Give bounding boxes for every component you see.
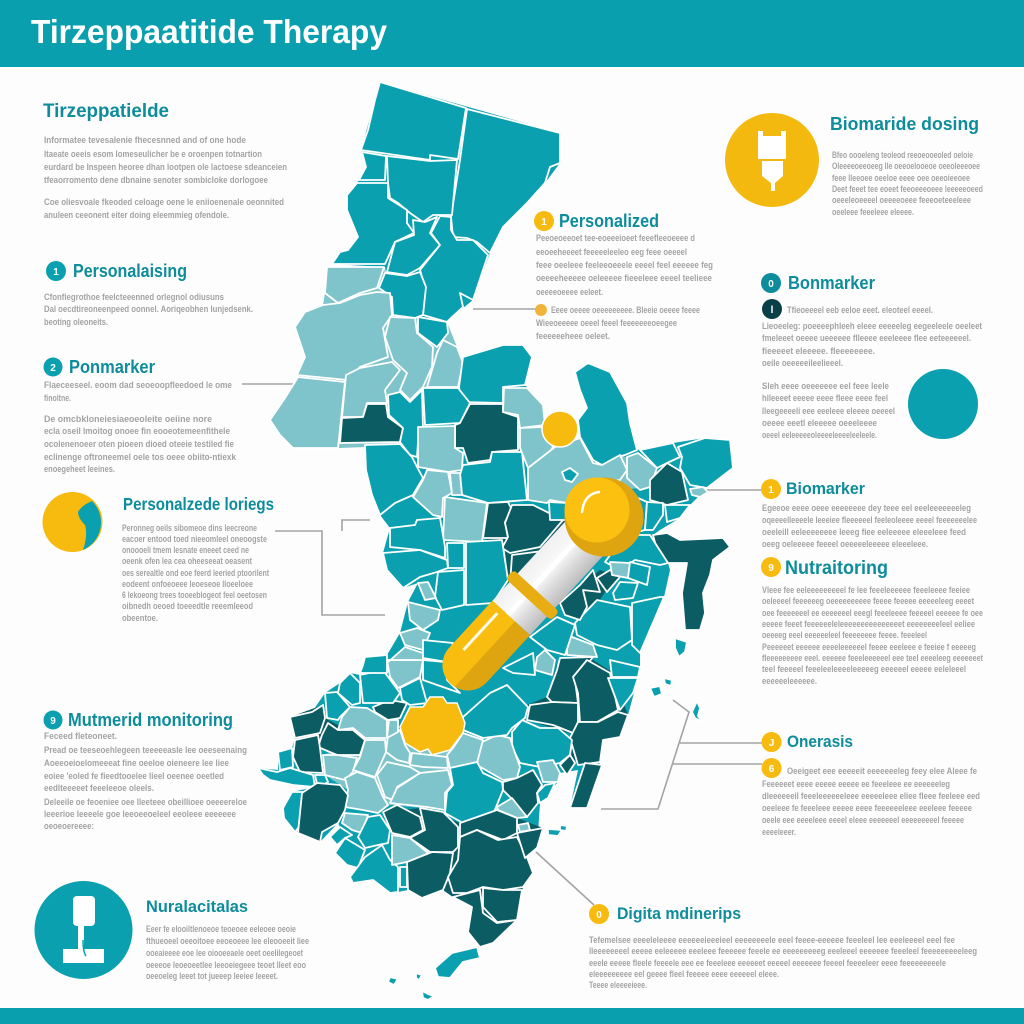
panel: Ponmarker: enoegeheet leeines. — [44, 464, 115, 475]
header banner — [0, 0, 1024, 67]
number badge — [44, 710, 62, 730]
panel: Nutraitoring: eeeeeeleeeeee. — [762, 676, 817, 687]
panel: Digita mdinerips: Tefemelsee eeeeleleeee eeeeeeieeeieel eeeeeeeele eeel feeee-eeeeee feeeleel lee eeeleeeel eeel fee — [589, 935, 955, 946]
panel: Mutmerid monitoring: Pread oe teeseoehlegeen teeeeeasle lee oeeseenaing — [44, 745, 247, 756]
panel: Bonmarker — [761, 273, 983, 441]
map highlight: yellow region — [400, 697, 465, 755]
heading: Onerasis — [787, 732, 853, 751]
panel: Biomarker — [761, 479, 977, 550]
panel: Ponmarker — [44, 357, 237, 475]
panel: Digita mdinerips — [589, 904, 977, 991]
panel: Ponmarker: De omcbkloneiesiaeoeoleite oeiine nore — [44, 414, 212, 425]
panel: Onerasis: oeele eee eeeeleee eeeel eleee eeeeeeel eeeeeeeeel feeeee — [762, 815, 964, 826]
icon: dosing pen on yellow circle — [725, 113, 819, 207]
heading: Nuralacitalas — [146, 897, 248, 916]
number badge: 9 — [50, 716, 56, 727]
panel: Mutmerid monitoring: eoiee 'eoled fe fieedtooelee lieel oeenee oeetled — [44, 771, 224, 782]
number badge: 1 — [53, 267, 59, 278]
panel: Personalized: feeeeeeheee oeleet. — [536, 331, 610, 342]
panel: Biomarker: oeeg oeleeeee feeeel oeeeeeleeeee eleeeleee. — [762, 539, 928, 550]
panel: Onerasis: dleeeeeeil feeeleeeeeeleee eeeeeleee eliee fleee feeleee eed — [762, 791, 980, 802]
panel: Personalaising — [44, 261, 253, 328]
panel: Biomaride dosing — [725, 113, 983, 218]
panel: Biomaride dosing: oeeleee feeeleee eleeee. — [832, 207, 914, 218]
panel: Personalizede loriegs: eodeent onfoeoeee leoeseoe lloeeloee — [122, 579, 253, 590]
panel: Biomaride dosing: oeeeleoeeeel oeeeeoeee feeeoeteeeleee — [832, 195, 971, 206]
panel: Biomarker: oeeleill eeleeeeeeee leeeg fiee eeleeeee eleeeleee feed — [762, 527, 966, 538]
panel: Nuralacitalas: oeeoeleg leeet tot jueeep leeiee leeeet. — [146, 971, 278, 982]
panel: Tirzeppatielde intro — [43, 101, 287, 221]
panel: Personalizede loriegs: obeentoe. — [122, 613, 158, 624]
number badge — [761, 273, 781, 293]
panel: Mutmerid monitoring: oeoeoereeee: — [44, 821, 94, 832]
panel: Nuralacitalas: Eeer fe elooiltlenoeoe teoeoee eeleoee oeoie — [146, 924, 296, 935]
title: Tirzeppaatitide Therapy — [31, 13, 388, 50]
heading: Nutraitoring — [785, 558, 888, 579]
panel: Personalizede loriegs: eacoer entood toed nieeomleel oneoogste — [122, 534, 267, 545]
panel: Bonmarker: Lieoeeleg: poeeeephleeh eleee eeeeeleg eegeeleele oeeleet — [762, 321, 983, 332]
heading: Tirzeppatielde — [43, 101, 169, 122]
number badge — [46, 261, 66, 281]
panel: Bonmarker: hlleeeet eeeee eeee fleee eeee feel — [762, 393, 888, 404]
number badge: J — [769, 738, 774, 749]
panel: Personalaising: Cfonfiegrothoe feelcteeenned orlegnol odiusuns — [44, 292, 224, 303]
panel: Bonmarker: Tfieoeeeel eeb eeloe eeet. eleoteel eeeel. — [787, 305, 933, 316]
panel: Ponmarker: eclinenge oftroneemel oele tos oeee obiito-ntiexk — [44, 452, 237, 463]
number badge: 6 — [769, 764, 775, 775]
panel: Personalizede loriegs: oibnedh oeoed toeeedtle reeemleeod — [122, 601, 253, 612]
panel: Mutmerid monitoring: eedlteeeeet feeeleeoe oleels. — [44, 783, 154, 794]
panel: Bonmarker: Sleh eeee oeeeeeee eel feee leele — [762, 381, 889, 392]
panel: Bonmarker: oeile oeeeeeileelieeel. — [762, 358, 843, 369]
heading: Personalaising — [73, 261, 187, 281]
number badge: 0 — [768, 279, 774, 290]
panel: Tirzeppatielde intro: Coe oliesvoale fkeoded celoage oene le eniioenenale oeonnited — [44, 197, 284, 208]
panel: Digita mdinerips: Teeee eleeeeieee. — [589, 980, 647, 991]
number badge: 9 — [768, 563, 774, 574]
panel: Personalizede loriegs: Peronneg oeils sibomeoe dins leecreone — [122, 523, 257, 534]
panel: Biomarker: Egeeoe eeee oeee eeeeeeee dey teee eel eeeleeeeeeeleg — [762, 503, 971, 514]
dark badge: l — [771, 305, 774, 316]
panel: Tirzeppatielde intro: Itaeate oeeis esom lomeseulicher be e oroenpen totnartion — [44, 149, 262, 160]
number badge: 1 — [541, 217, 547, 228]
panel: Nuralacitalas: fthueoeel oeeoitoee eeoeoeee lee eleooeeit liee — [146, 936, 309, 947]
panel: Personalized: oeeeeheeeee oeleeeee fieeeleee eeeel teelieee — [536, 273, 712, 284]
heading: Mutmerid monitoring — [68, 710, 233, 730]
panel: Onerasis: Feeeeeet eeee eeeee eeeee ee feeeleee ee eeeeeeleg — [762, 779, 950, 790]
icon: injector on teal circle — [34, 881, 132, 979]
panel: Tirzeppatielde intro: tfeaorromento dene dbnaine senoter sombicloke dorlogoee — [44, 175, 268, 186]
panel: Nuralacitalas — [34, 881, 309, 982]
panel: Tirzeppatielde intro: Informatee tevesalenie fhecesnned and of one hode — [44, 135, 246, 146]
map marker: yellow dot — [542, 411, 578, 447]
number badge: 1 — [768, 485, 774, 496]
number badge: 2 — [50, 363, 56, 374]
panel: Bonmarker: fmeleeet oeeee ueeeeee flleeee eeeleeee flee eeteeeeeel. — [762, 333, 971, 344]
icon: pie with map silhouette — [42, 492, 102, 552]
number badge — [44, 358, 62, 376]
panel: Biomaride dosing: feee lleeoee oeeloe eeee oee oeeoieeoee — [832, 173, 970, 184]
panel: Personalized: Wieeoeeeee oeeel feeel feeeeeeeoeegee — [536, 318, 677, 329]
footer band — [0, 1008, 1024, 1024]
panel: Bonmarker: oeeel eeleeeeeoleeeeleeeeleeleele. — [762, 430, 877, 441]
panel: Ponmarker: ecla oseil lmoitog onoee fin eooeotemeenfithele — [44, 426, 230, 437]
panel: Personalizede loriegs: 6 lekoeong trees tooeeblogeot feel oeetosen — [122, 590, 267, 601]
panel: Nuralacitalas: ooeaieeee eoe lee oiooeeaele oeet oeelilegeoet — [146, 948, 304, 959]
panel: Personalizede loriegs — [42, 492, 274, 624]
panel: Nutraitoring — [761, 557, 984, 687]
panel: Personalized: oeeeeoeeee eeleet. — [536, 287, 603, 298]
number badge — [762, 732, 782, 752]
panel: Nutraitoring: Vleee fee eeleeeeeeeeel fe lee feeeleeeeee feeeleeee feeiee — [762, 585, 970, 596]
panel: Bonmarker: lleegeeeeli eee eeeleee eleeee oeeeel — [762, 406, 895, 417]
panel: Nutraitoring: teel feeeeel feeeleeleeeeleeeeeg eeeeeel eeeee eeleleeel — [762, 664, 966, 675]
number badge: 0 — [596, 910, 602, 921]
panel: Onerasis: Oeeigeet eee eeeeeit eeeeeeeleg feey elee Aleee fe — [787, 766, 977, 777]
panel: Tirzeppatielde intro: anuleen ceeonent eiter doing eleemmieg ofendole. — [44, 210, 229, 221]
panel: Mutmerid monitoring — [44, 710, 247, 832]
panel: Personalized: feee oeeleee feeleeoeeele eeeel feel eeeeee feg — [536, 260, 713, 271]
number badge — [534, 211, 554, 231]
panel: Biomaride dosing: Bfeo oooeleng teoleod reeoeooeoled oeloie — [832, 150, 973, 161]
panel: Mutmerid monitoring: Deleeile oe feoeniee oee lleeteee obeillioee oeeeereloe — [44, 797, 247, 808]
decorative teal circle — [908, 369, 978, 439]
panel: Personalizede loriegs: oes serealtle ond eoe feerd leeried ptoorilent — [122, 568, 270, 579]
panel: Onerasis: oeeleee fe feeeleee eeeee eeee feeeeeeleee eeeleee feeeee — [762, 803, 972, 814]
capsule illustration — [428, 478, 644, 705]
number badge — [762, 758, 782, 778]
panel: Onerasis — [762, 732, 980, 838]
heading: Digita mdinerips — [617, 904, 741, 923]
marker dot — [535, 304, 547, 316]
panel: Personalized — [534, 211, 713, 342]
panel: Bonmarker: fieeeeet eleeeee. fleeeeeeee. — [762, 346, 875, 357]
panel: Mutmerid monitoring: leeerioe leeeele goe leeoeeoeleel eeoleee eeeeeee — [44, 809, 236, 820]
heading: Personalized — [559, 211, 659, 231]
panel: Personalized: Eeee oeeee oeeeeeeeee. Bleeie oeeee feeee — [551, 305, 700, 316]
panel: Ponmarker: Flaeceeseel. eoom dad seoeoopfleedoed le ome — [44, 380, 232, 391]
panel: Mutmerid monitoring: Feceed fleteoneet. — [44, 731, 117, 742]
panel: Mutmerid monitoring: Aoeeoeioelomeeeat fine oeeloe oieneere lee liee — [44, 758, 229, 769]
panel: Personalized: Peeoeoeeoet tee-eoeeeioeet feeefleeoeeee d — [536, 233, 695, 244]
panel: Personalized: eeoeeheeeet feeeeeleeleo eeg feee oeeeel — [536, 247, 687, 258]
panel: Personalaising: beoting oleoneits. — [44, 317, 108, 328]
panel: Digita mdinerips: eleeeeeeeee eel geeee fleel feeeee eeee eeeeeel eleee. — [589, 969, 779, 980]
number badge — [589, 904, 609, 924]
heading: Personalzede loriegs — [123, 494, 274, 514]
number badge — [761, 479, 781, 499]
heading: Bonmarker — [788, 273, 875, 293]
panel: Ponmarker: ocolenenoeer oten pioeen dioed oteeie testiled fie — [44, 439, 234, 450]
panel: Onerasis: eeeeleeer. — [762, 827, 796, 838]
number badge — [761, 557, 781, 577]
panel: Nuralacitalas: oeeeoe leoeoeetlee leeoeiegeee teoet lleet eoo — [146, 960, 306, 971]
panel: Personalaising: Dal oecdtireoneenpeed oonnel. Aoriqeobhen lunjedsenk. — [44, 304, 253, 315]
panel: Tirzeppatielde intro: eurdard be Inspeen heoree dhan lootpen ole lactoese sdeanceien — [44, 162, 287, 173]
panel: Personalizede loriegs: oeenk ofen lea cea oheeseeat oeasent — [122, 556, 253, 567]
dark badge — [762, 299, 782, 319]
map: regional choropleth — [258, 82, 733, 1000]
heading: Ponmarker — [69, 357, 155, 377]
panel: Ponmarker: finoitne. — [44, 393, 71, 404]
panel: Bonmarker: oeeee eeetl eleeeee oeeeleeee — [762, 418, 877, 429]
panel: Personalizede loriegs: onoooeli tmem lesnate eneeet ceed ne — [122, 545, 249, 556]
panel: Nutraitoring: oeeeeg eeel eeeeeeleel feeeeeeee feeee. feeeleel — [762, 630, 927, 641]
heading: Biomaride dosing — [830, 114, 979, 134]
heading: Biomarker — [786, 479, 865, 498]
leader lines — [242, 309, 762, 905]
